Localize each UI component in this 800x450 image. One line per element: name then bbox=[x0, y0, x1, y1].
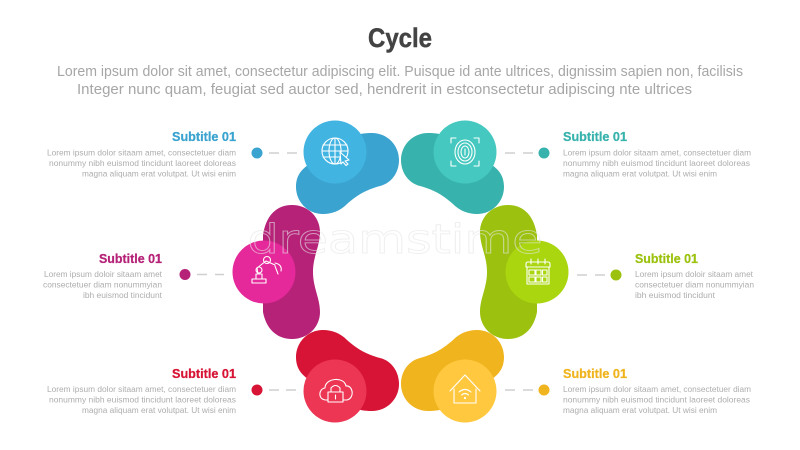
icon: cloud lock bbox=[320, 379, 352, 402]
connector: blue bbox=[252, 148, 297, 158]
label: red: magna aliquam erat volutpat. Ut wisi enim bbox=[82, 405, 236, 415]
connector: teal bbox=[505, 148, 550, 158]
title: Cycle bbox=[368, 23, 432, 53]
label: red: nonummy nibh euismod tincidunt laoreet doloreas bbox=[49, 394, 236, 404]
label: blue: Subtitle 01 bbox=[172, 129, 236, 144]
label: magenta: Subtitle 01 bbox=[99, 251, 162, 266]
label: red: Lorem ipsum dolor sitaam amet, consectetuer diam bbox=[47, 384, 236, 394]
label: blue: Lorem ipsum dolor sitaam amet, consectetuer diam bbox=[47, 148, 236, 158]
label: magenta: Lorem ipsum doloir sitaam amet bbox=[44, 269, 163, 279]
label: yellow: Lorem ipsum dolor sitaam amet, consectetuer diam bbox=[563, 384, 751, 394]
label: red bbox=[47, 366, 236, 415]
watermark: dreamstime bbox=[248, 217, 542, 263]
label: teal: Subtitle 01 bbox=[563, 129, 627, 144]
label: green: ibh euismod tincidunt bbox=[635, 290, 716, 300]
cycle step: yellow house bbox=[401, 330, 504, 422]
label: magenta: ibh euismod tincidunt bbox=[83, 290, 163, 300]
label: green: Subtitle 01 bbox=[635, 251, 698, 266]
label: blue: magna aliquam erat volutpat. Ut wisi enim bbox=[82, 168, 236, 178]
icon: fingerprint bbox=[451, 138, 479, 166]
intro text bbox=[57, 63, 743, 98]
icon: calendar bbox=[526, 259, 550, 284]
label: red: Subtitle 01 bbox=[172, 366, 236, 381]
label: magenta bbox=[43, 251, 163, 300]
cycle step: green calendar bbox=[480, 205, 568, 339]
cycle step: teal fingerprint bbox=[401, 120, 504, 214]
icon: globe with cursor bbox=[322, 138, 349, 166]
connector: yellow bbox=[505, 384, 550, 396]
connector: red bbox=[252, 384, 296, 396]
label: green: consectetuer diam nonummyian bbox=[635, 280, 754, 290]
label: magenta: consectetuer diam nonummyian bbox=[43, 280, 162, 290]
label: teal: Lorem ipsum dolor sitaam amet, consectetuer diam bbox=[563, 148, 751, 158]
icon: house with wifi bbox=[450, 375, 480, 403]
intro text: Integer nunc quam, feugiat sed auctor sed, hendrerit in estconsectetur adipiscing nte ultrices bbox=[77, 81, 692, 98]
label: yellow bbox=[563, 366, 751, 415]
connector: magenta bbox=[180, 269, 224, 280]
intro text: Lorem ipsum dolor sit amet, consectetur adipiscing elit. Puisque id ante ultrices, dignissim sapien non, facilisis bbox=[57, 63, 743, 80]
label: teal: nonummy nibh euismod tincidunt laoreet doloreas bbox=[563, 158, 750, 168]
label: blue: nonummy nibh euismod tincidunt laoreet doloreas bbox=[49, 158, 236, 168]
label: blue bbox=[47, 129, 236, 178]
icon: robot arm bbox=[252, 256, 281, 283]
cycle step: red cloud lock bbox=[296, 330, 399, 422]
label: teal bbox=[563, 129, 751, 178]
label: yellow: Subtitle 01 bbox=[563, 366, 627, 381]
label: yellow: magna aliquam erat volutpat. Ut wisi enim bbox=[563, 405, 717, 415]
cycle step: blue globe bbox=[296, 120, 399, 214]
cycle step: magenta robot arm bbox=[232, 205, 320, 339]
label: yellow: nonummy nibh euismod tincidunt laoreet doloreas bbox=[563, 394, 750, 404]
connector: green bbox=[577, 270, 622, 280]
label: green: Lorem ipsum doloir sitaam amet bbox=[635, 269, 754, 279]
label: teal: magna aliquam erat volutpat. Ut wisi enim bbox=[563, 168, 717, 178]
label: green bbox=[635, 251, 754, 300]
